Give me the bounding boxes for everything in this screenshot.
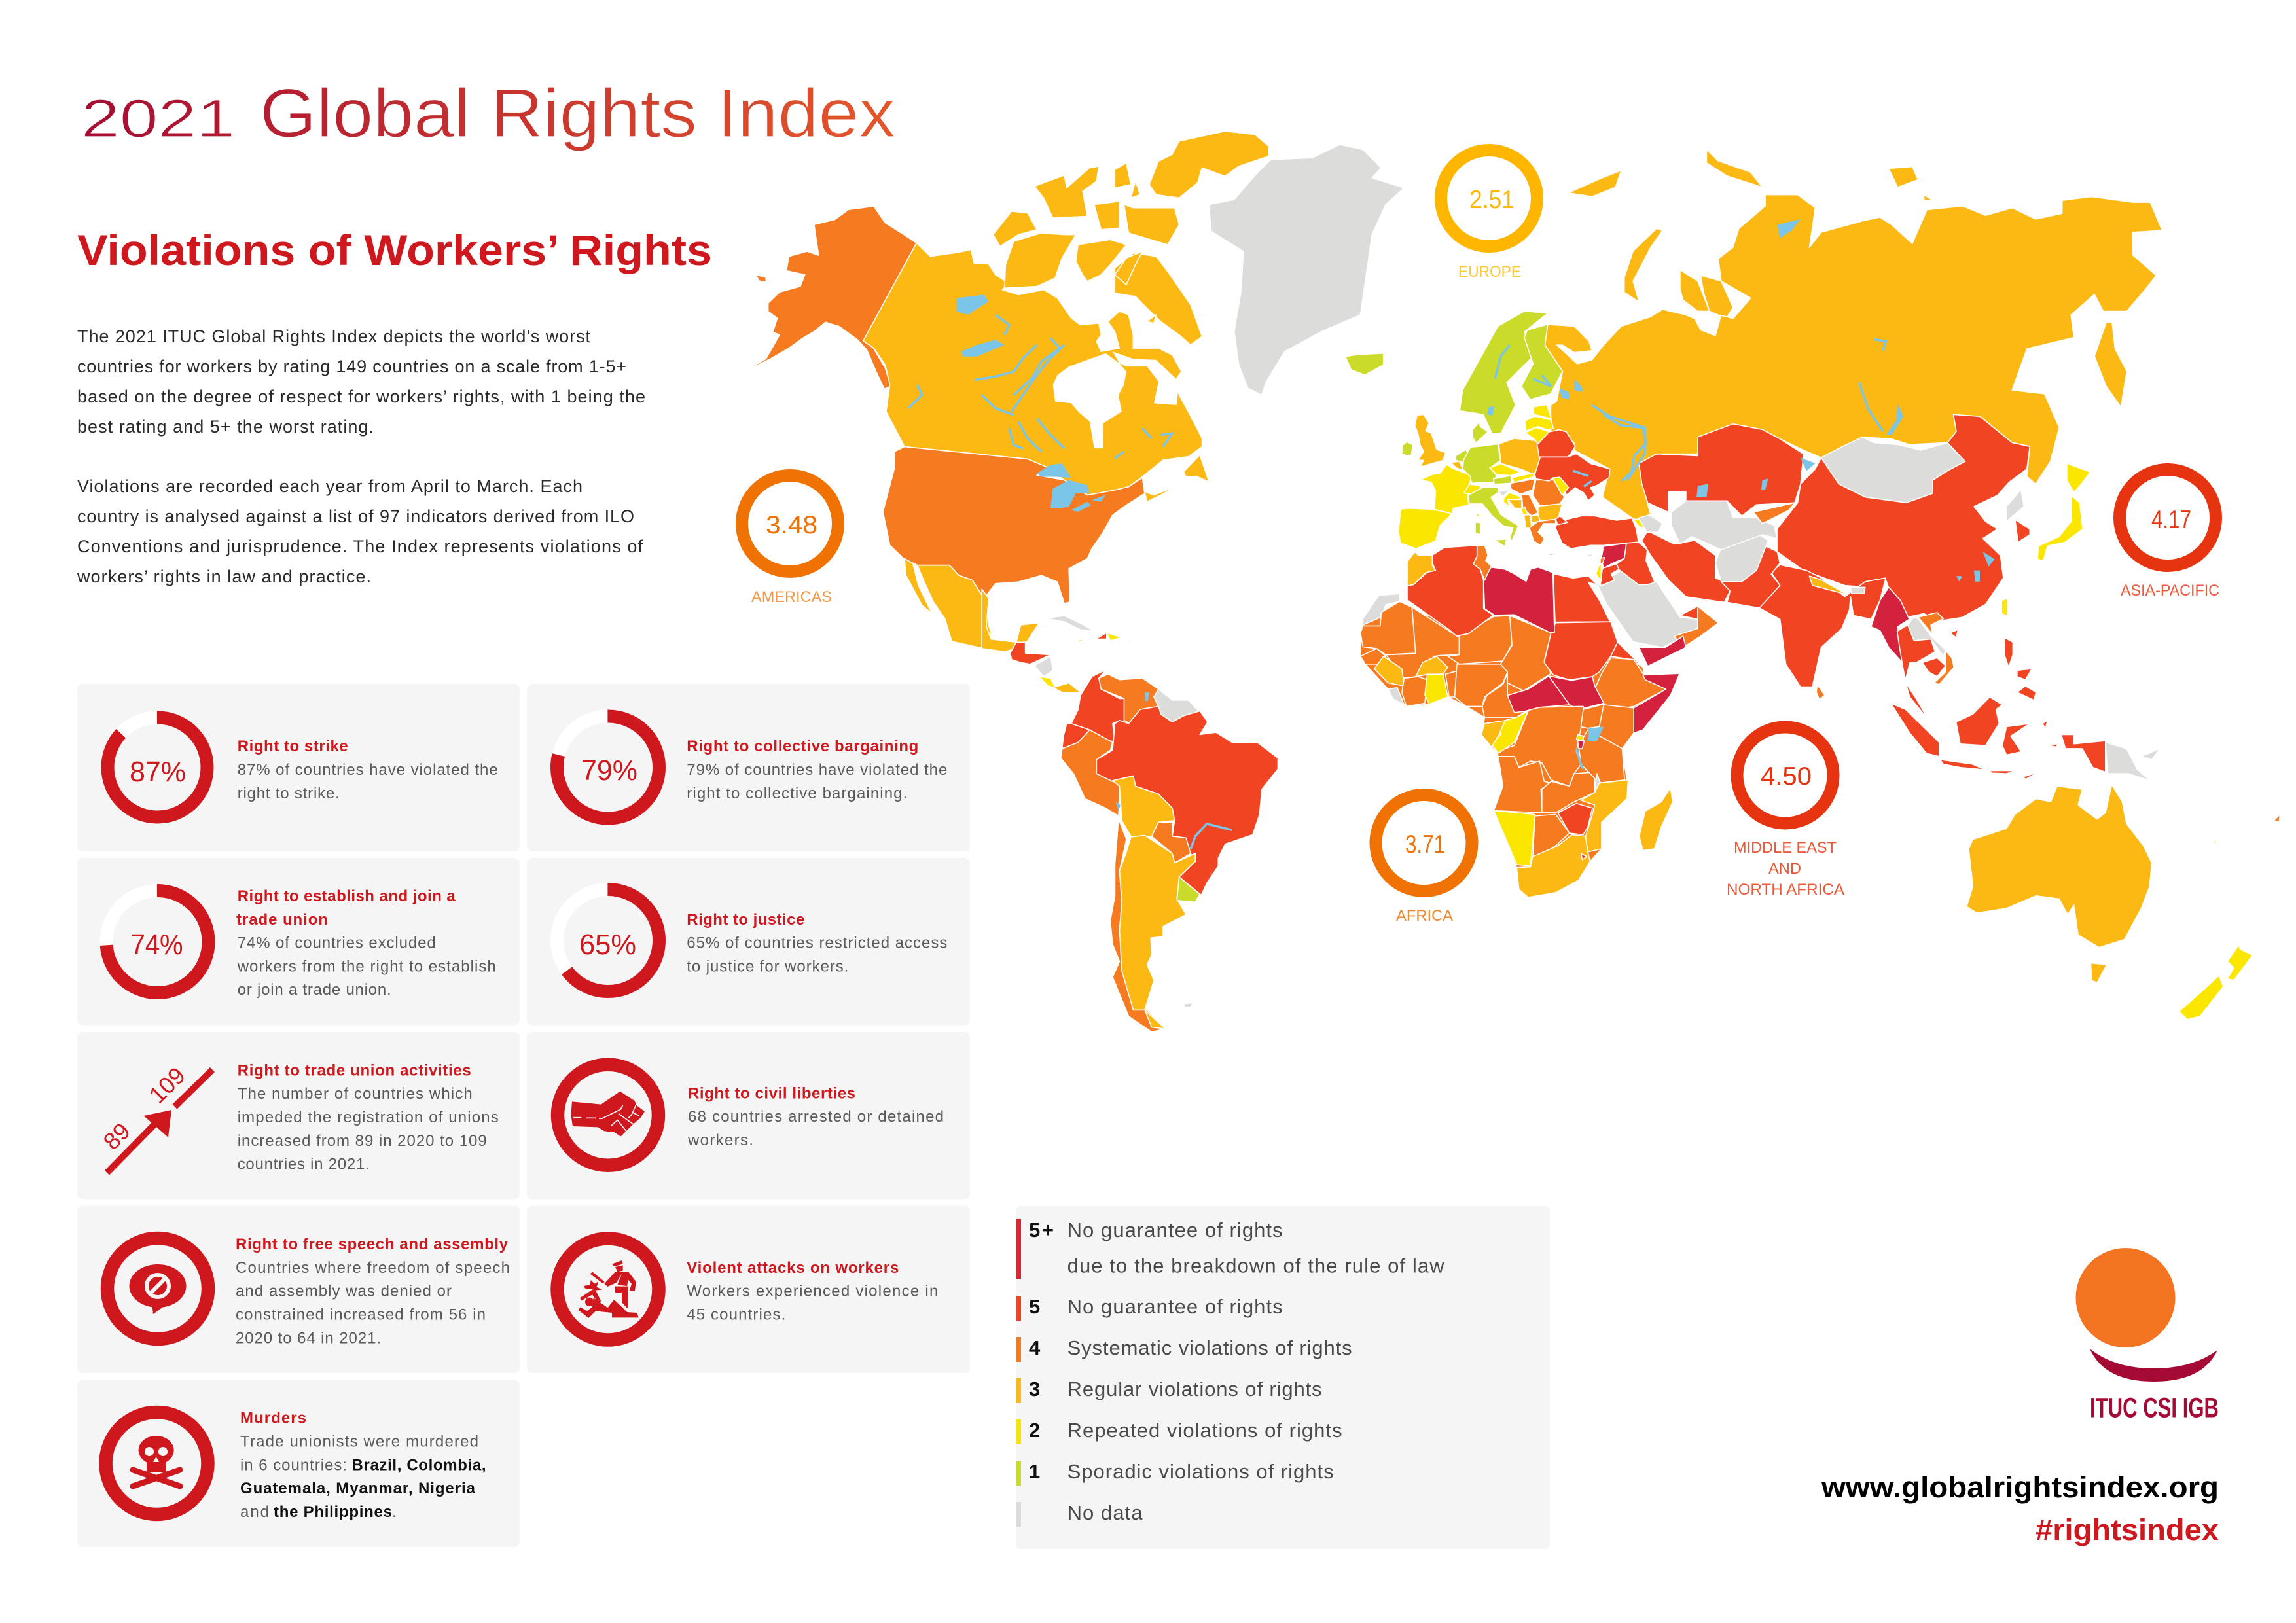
panel: right to free speech and assembly: 2020 to 64 in 2021. — [236, 1329, 381, 1347]
text block: introduction: The 2021 ITUC Global Rights Index depicts the world’s worst — [77, 327, 590, 346]
country: uae — [1680, 606, 1698, 619]
legend item: no data — [1016, 1501, 1143, 1527]
country: uruguay — [1177, 877, 1200, 902]
hudson bay — [1053, 353, 1126, 448]
panel: right to collective bargaining: 79% of countries have violated the — [687, 761, 947, 779]
country: france — [1420, 465, 1472, 514]
country: greece — [1530, 519, 1556, 545]
country: mozambique — [1581, 780, 1628, 852]
country: united states — [883, 447, 1145, 603]
panel: right to establish and join a trade union: trade union — [236, 911, 328, 929]
country: nepal — [1810, 576, 1848, 595]
panel: violent attacks on workers: Violent attacks on workers — [687, 1259, 899, 1277]
countries: east africa — [1590, 705, 1634, 749]
panel: right to trade union activities: impeded the registration of unions — [238, 1109, 499, 1126]
panel: right to trade union activities: increased from 89 in 2020 to 109 — [238, 1132, 487, 1150]
lakes: asia — [1886, 403, 1903, 435]
icon: arrow 89 to 109 — [98, 1061, 212, 1173]
country: syria — [1602, 543, 1626, 568]
countries: guianas — [1154, 689, 1200, 722]
country: mexico (north) — [918, 565, 991, 649]
lakes: canada — [956, 294, 988, 315]
legend item: 5: No guarantee of rights — [1067, 1295, 1283, 1318]
country: italy — [1468, 488, 1518, 541]
lakes: great lakes — [1037, 463, 1071, 478]
country: kazakhstan — [1639, 424, 1804, 516]
donut: 74% — [106, 891, 208, 993]
country: united kingdom — [1415, 414, 1445, 467]
text block: introduction: countries for workers by rating 149 countries on a scale from 1-5+ — [77, 357, 626, 376]
country: thailand — [1897, 625, 1935, 680]
country: congo — [1492, 711, 1528, 753]
donut: 87% — [107, 717, 207, 817]
legend item: 5+: due to the breakdown of the rule of law — [1067, 1254, 1444, 1277]
legend item: 3: Regular violations of rights — [1067, 1378, 1322, 1400]
icon: arrow 89 to 109: 109 — [143, 1061, 190, 1109]
ring: europe 2.51: EUROPE — [1458, 263, 1521, 281]
text block: introduction: based on the degree of respect for workers’ rights, with 1 being the — [77, 387, 645, 406]
country: ecuador — [1062, 724, 1090, 749]
icon: skull and crossbones in ring — [106, 1412, 208, 1514]
country: philippines — [2005, 637, 2036, 700]
panel: right to civil liberties: 68 countries arrested or detained — [688, 1108, 944, 1126]
country: germany — [1463, 444, 1501, 483]
panel: violent attacks on workers — [527, 1205, 970, 1373]
panel: murders — [77, 1380, 520, 1547]
country: south sudan — [1549, 676, 1604, 709]
panel: murders: Brazil, Colombia, — [352, 1456, 486, 1474]
icon: police violence in ring — [558, 1238, 658, 1340]
panel: right to establish and join a trade union: workers from the right to establish — [237, 958, 496, 975]
country: sudan — [1544, 622, 1618, 680]
heading: violations of workers' rights: Violations of Workers’ Rights — [77, 226, 712, 274]
country: niger — [1448, 616, 1512, 664]
panel: murders: and — [240, 1503, 269, 1521]
country: spain — [1399, 508, 1452, 548]
country: ethiopia — [1595, 658, 1666, 709]
country: nigeria — [1455, 664, 1507, 706]
ring: asia-pacific 4.17: ASIA-PACIFIC — [2121, 582, 2219, 599]
country: yemen — [1639, 636, 1686, 666]
country: canada — [863, 243, 1202, 495]
text block: introduction: best rating and 5+ the worst rating. — [77, 417, 374, 437]
panel: right to trade union activities: countries in 2021. — [238, 1156, 370, 1173]
panel: right to free speech and assembly: constrained increased from 56 in — [236, 1306, 486, 1323]
panel: right to civil liberties: workers. — [687, 1132, 753, 1149]
panel: right to strike: 87% of countries have violated the — [238, 761, 498, 779]
donut: 65%: 65% — [579, 929, 636, 961]
country: central african republic — [1507, 676, 1570, 713]
country: india — [1759, 565, 1886, 687]
country: oman — [1674, 606, 1718, 647]
country: japan — [2037, 495, 2083, 561]
donut: 87%: 87% — [130, 756, 186, 788]
country: china — [1777, 414, 2030, 621]
africa base — [1361, 613, 1666, 897]
panel: violent attacks on workers: Workers experienced violence in — [687, 1283, 938, 1300]
panel: right to justice: to justice for workers. — [687, 958, 848, 975]
website url: www.globalrightsindex.org — [1821, 1471, 2219, 1504]
country: chile — [1110, 819, 1166, 1032]
map: russia and asia — [1460, 150, 2162, 687]
country: vietnam — [1918, 613, 1954, 685]
country: madagascar — [1640, 788, 1673, 850]
country: iran — [1642, 531, 1733, 602]
panel: right to civil liberties — [527, 1032, 970, 1199]
country: norway and sweden — [1460, 312, 1548, 433]
donut: 79% — [557, 716, 659, 818]
country: iceland — [1345, 353, 1384, 375]
legend item: 4: Systematic violations of rights — [1067, 1336, 1352, 1359]
ring: africa 3.71 — [1376, 794, 1472, 925]
country: western sahara — [1363, 594, 1399, 625]
donut: 74%: 74% — [131, 929, 183, 961]
panel: right to establish and join a trade union — [77, 858, 520, 1025]
legend item: 5: 5 — [1029, 1295, 1040, 1318]
legend item: 5+: 5+ — [1029, 1219, 1054, 1241]
panel: right to establish and join a trade union: Right to establish and join a — [238, 887, 456, 905]
country: angola — [1494, 757, 1551, 813]
country: afghanistan — [1715, 533, 1768, 582]
logo: ITUC CSI IGB: ITUC CSI IGB — [2090, 1393, 2219, 1424]
country: mauritania — [1361, 601, 1416, 654]
title: 2021 — [81, 89, 235, 149]
panel: right to trade union activities: The number of countries which — [238, 1085, 473, 1103]
country: somalia — [1634, 673, 1679, 733]
country: romania — [1533, 480, 1564, 506]
ring: middle east and north africa 4.50: AND — [1768, 860, 1801, 878]
map: central and south america — [982, 589, 1278, 1032]
panel: right to strike — [77, 684, 520, 851]
panel: right to justice: Right to justice — [687, 911, 804, 929]
panel: right to free speech and assembly: Countries where freedom of speech — [236, 1259, 510, 1277]
panel: right to justice: 65% of countries restricted access — [687, 935, 947, 952]
ring: europe 2.51 — [1441, 151, 1537, 281]
country: cameroon — [1482, 673, 1526, 717]
country: tunisia — [1473, 545, 1491, 580]
ring: americas 3.48 — [742, 475, 838, 606]
lakes: europe — [1573, 471, 1588, 476]
country: iraq — [1617, 542, 1655, 584]
hashtag: #rightsindex — [2036, 1513, 2219, 1546]
ring: americas 3.48: AMERICAS — [751, 588, 832, 606]
legend item: 5+ — [1016, 1219, 1444, 1279]
ring: americas 3.48: 3.48 — [766, 511, 817, 539]
panel: violent attacks on workers: 45 countries. — [687, 1306, 785, 1323]
panel: murders: . — [392, 1503, 397, 1521]
country: mexico (south) — [982, 589, 1039, 652]
legend item: 1: Sporadic violations of rights — [1067, 1460, 1334, 1483]
country: finland — [1521, 325, 1562, 399]
panel: right to civil liberties: Right to civil liberties — [688, 1084, 855, 1102]
country: zimbabwe — [1558, 804, 1592, 834]
country: gabon — [1481, 721, 1505, 747]
country: cambodia — [1922, 658, 1946, 677]
country: zambia — [1542, 772, 1595, 813]
icon: arrow 89 to 109: 89 — [98, 1118, 135, 1155]
country: australia — [1967, 785, 2152, 948]
title: Global Rights Index — [260, 75, 895, 152]
panel: murders: in 6 countries: — [240, 1456, 347, 1474]
lakes: south america — [1191, 824, 1232, 849]
panel: right to strike: Right to strike — [238, 738, 348, 755]
country: mali — [1386, 607, 1460, 678]
country: greenland — [1209, 145, 1404, 395]
country: venezuela — [1099, 674, 1158, 724]
map: south-east asia and oceania — [1816, 613, 2280, 1020]
country: belarus — [1537, 430, 1575, 457]
country: argentina — [1119, 835, 1195, 1010]
country: turkey — [1556, 516, 1638, 548]
country: brazil — [1096, 706, 1278, 895]
map: europe, middle east and north africa — [1399, 404, 1662, 636]
country: mongolia — [1821, 437, 1965, 503]
legend item: 5+: No guarantee of rights — [1067, 1219, 1283, 1241]
panel: right to free speech and assembly: and assembly was denied or — [236, 1283, 452, 1300]
country: libya — [1484, 567, 1554, 633]
icon: speech bubble in ring — [107, 1238, 208, 1339]
countries: korea — [2006, 490, 2024, 522]
logo: ITUC CSI IGB — [2076, 1248, 2219, 1424]
legend item: 2: 2 — [1029, 1419, 1040, 1442]
text block: introduction — [77, 327, 645, 586]
countries: west africa — [1361, 649, 1386, 664]
panel: right to trade union activities: Right to trade union activities — [238, 1061, 471, 1079]
country: ireland — [1402, 442, 1412, 456]
ring: africa 3.71: 3.71 — [1405, 830, 1445, 859]
panel: right to trade union activities — [77, 1032, 520, 1199]
panel: murders: Murders — [240, 1410, 306, 1427]
ring: asia-pacific 4.17 — [2119, 470, 2219, 599]
panel: murders: the Philippines — [274, 1503, 392, 1521]
country: algeria — [1407, 545, 1494, 636]
panel: right to justice — [527, 858, 970, 1025]
legend item: no data: No data — [1067, 1501, 1143, 1524]
world map — [738, 131, 2280, 1032]
country: new zealand — [2227, 932, 2253, 980]
legend item: 2: Repeated violations of rights — [1067, 1419, 1342, 1442]
country: egypt — [1553, 574, 1610, 622]
ring: europe 2.51: 2.51 — [1469, 186, 1515, 214]
panel: murders: Trade unionists were murdered — [240, 1433, 478, 1450]
country: colombia — [1071, 669, 1140, 742]
text block: introduction: Conventions and jurisprudence. The Index represents violations of — [77, 537, 643, 556]
country: saudi arabia — [1598, 571, 1698, 647]
ring: middle east and north africa 4.50 — [1727, 727, 1844, 899]
country: dr congo — [1496, 706, 1583, 786]
country: sri lanka — [1816, 685, 1825, 700]
country: poland — [1499, 438, 1540, 474]
country: south africa — [1516, 834, 1590, 897]
ring: asia-pacific 4.17: 4.17 — [2151, 506, 2191, 534]
icon: fist in ring — [558, 1065, 658, 1166]
country: alaska — [738, 206, 916, 389]
country: morocco — [1407, 552, 1435, 586]
map: africa — [1361, 594, 1679, 897]
country: pakistan — [1721, 546, 1780, 608]
panel: right to strike: right to strike. — [238, 785, 340, 802]
donut: 65% — [557, 889, 659, 991]
country: chad — [1501, 616, 1551, 690]
ring: middle east and north africa 4.50: NORTH AFRICA — [1727, 881, 1844, 899]
country: paraguay — [1152, 822, 1191, 863]
panel: right to collective bargaining: Right to collective bargaining — [687, 738, 918, 755]
ring: middle east and north africa 4.50: MIDDLE EAST — [1734, 839, 1837, 857]
panel: right to establish and join a trade union: 74% of countries excluded — [238, 935, 436, 952]
country: bolivia — [1113, 776, 1175, 836]
country: myanmar — [1871, 587, 1909, 664]
country: peru — [1061, 730, 1119, 816]
text block: introduction: Violations are recorded each year from April to March. Each — [77, 476, 583, 496]
country: papua new guinea — [2106, 742, 2149, 781]
map: north america — [738, 131, 1404, 649]
text block: introduction: workers’ rights in law and practice. — [77, 567, 371, 586]
panel: right to free speech and assembly: Right to free speech and assembly — [236, 1236, 509, 1253]
country: namibia — [1494, 811, 1535, 866]
text block: introduction: country is analysed against a list of 97 indicators derived from ILO — [77, 507, 634, 526]
panel: right to collective bargaining — [527, 684, 970, 851]
donut: 79%: 79% — [581, 755, 637, 787]
countries: central asia — [1671, 501, 1777, 550]
ring: middle east and north africa 4.50: 4.50 — [1761, 762, 1812, 791]
country: ukraine — [1535, 454, 1610, 501]
country: indonesia — [1891, 697, 2106, 779]
ring: africa 3.71: AFRICA — [1396, 907, 1453, 925]
panel: right to establish and join a trade union: or join a trade union. — [238, 981, 391, 999]
country: botswana — [1533, 814, 1570, 857]
country: russia — [1545, 195, 2162, 521]
legend item: 1: 1 — [1029, 1460, 1040, 1483]
legend item: 3: 3 — [1029, 1378, 1040, 1400]
panel: right to free speech and assembly — [77, 1205, 520, 1373]
legend — [1016, 1206, 1550, 1549]
legend item: 4: 4 — [1029, 1336, 1041, 1359]
panel: right to collective bargaining: right to collective bargaining. — [687, 785, 907, 802]
panel: murders: Guatemala, Myanmar, Nigeria — [240, 1480, 476, 1497]
